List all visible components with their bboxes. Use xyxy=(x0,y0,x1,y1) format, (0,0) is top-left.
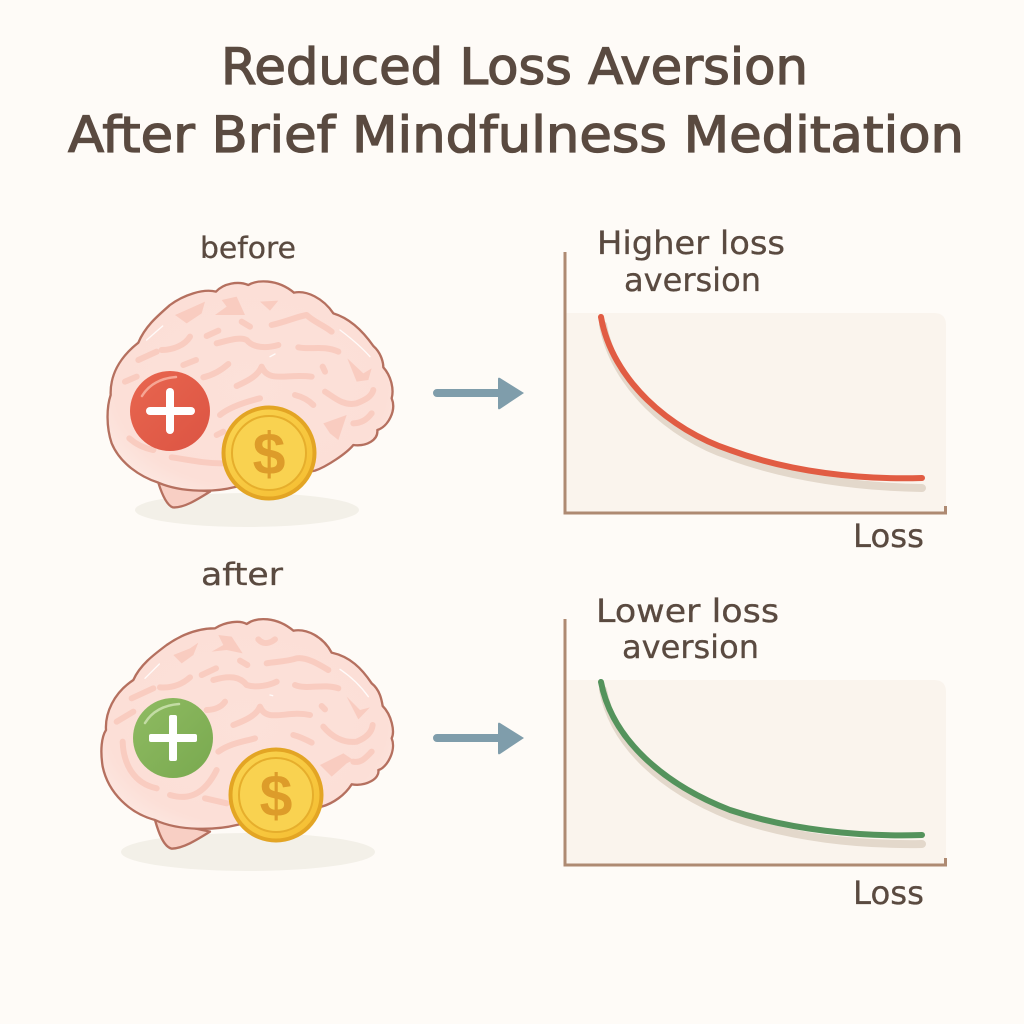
icon: green plus circle xyxy=(133,698,213,778)
title xyxy=(68,38,964,164)
before label: before xyxy=(200,231,296,265)
heading: higher loss aversion: Higher loss xyxy=(597,224,785,262)
curve: red xyxy=(601,317,922,478)
heading: lower loss aversion: Lower loss xyxy=(596,592,779,630)
icon: gold dollar coin: $ xyxy=(253,421,285,487)
arrow: after brain to chart xyxy=(433,723,524,754)
title: Reduced Loss Aversion xyxy=(221,38,808,96)
brain illustration: before xyxy=(108,281,393,527)
icon: gold dollar coin xyxy=(224,408,314,498)
icon: gold dollar coin after xyxy=(230,750,322,840)
heading: higher loss aversion: aversion xyxy=(624,261,761,299)
heading: lower loss aversion xyxy=(596,592,779,666)
after label: after xyxy=(201,557,283,593)
arrow: before brain to chart xyxy=(433,378,524,409)
chart: higher loss aversion xyxy=(565,224,946,555)
icon: gold dollar coin after: $ xyxy=(260,763,292,829)
heading: lower loss aversion: aversion xyxy=(622,628,759,666)
heading: higher loss aversion xyxy=(597,224,785,299)
brain illustration: after xyxy=(101,619,393,871)
title: After Brief Mindfulness Meditation xyxy=(68,106,964,164)
chart: lower loss aversion xyxy=(565,592,946,912)
axis label: loss: Loss xyxy=(853,517,924,555)
axis label: loss after: Loss xyxy=(853,874,924,912)
icon: red plus circle xyxy=(130,371,210,451)
curve: green xyxy=(601,682,922,835)
